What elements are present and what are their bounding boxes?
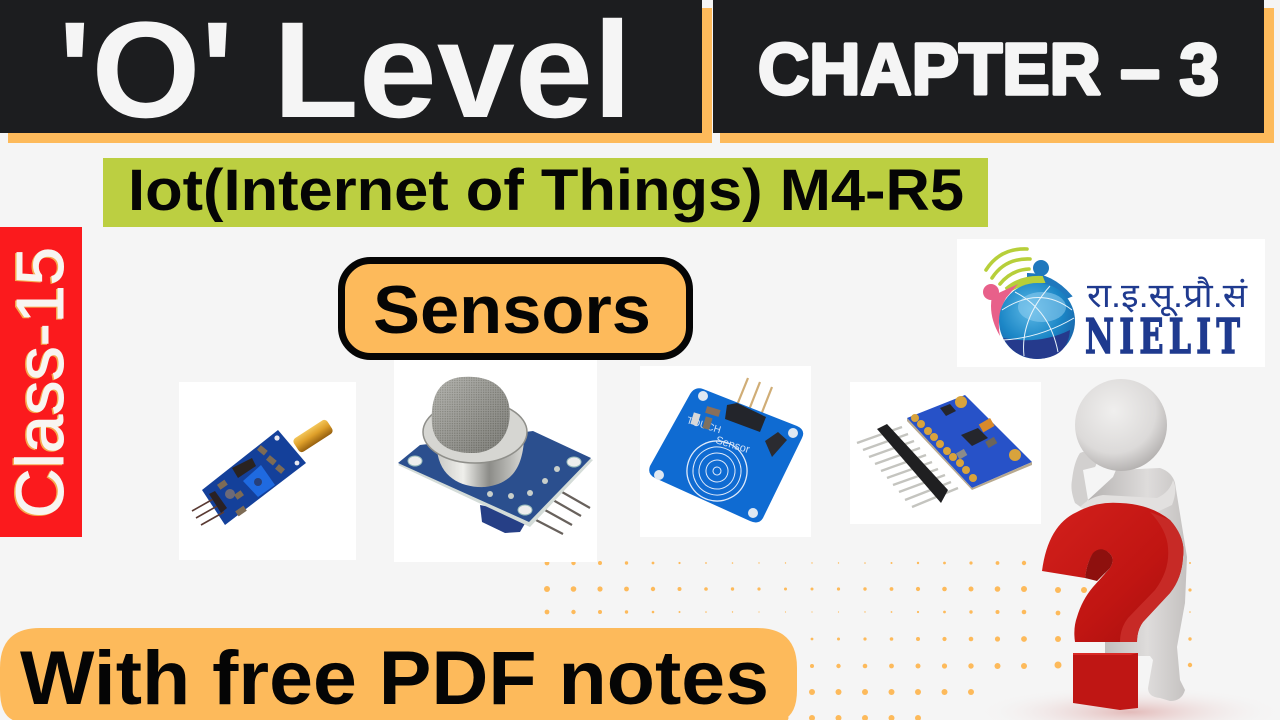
question mark shadow side	[1120, 512, 1183, 642]
image: tilt sensor module	[179, 382, 356, 560]
mesh dome	[432, 377, 510, 453]
header pins	[192, 498, 224, 525]
board label: Sensor	[714, 434, 751, 456]
potentiometer	[243, 465, 275, 497]
header pins	[735, 378, 772, 420]
gold tilt tube	[292, 418, 334, 454]
image: MPU motion sensor module	[850, 382, 1041, 524]
people figures	[1033, 260, 1049, 276]
hindi logotype: रा.इ.सू.प्रौ.सं	[1087, 276, 1248, 317]
wifi arcs	[986, 249, 1030, 284]
connector	[480, 505, 530, 533]
header block	[877, 424, 948, 503]
pcb	[649, 388, 803, 522]
metal base	[437, 440, 524, 487]
callout text: With free PDF notes	[20, 636, 769, 720]
question mark	[1042, 503, 1183, 642]
NIELIT wordmark: NIELIT	[1085, 308, 1245, 365]
pcb	[398, 433, 593, 527]
question mark dot	[1073, 653, 1138, 710]
Sensors text: Sensors	[373, 272, 651, 348]
connector	[725, 403, 766, 432]
callout: free PDF notes	[0, 628, 797, 720]
heading: Chapter 3: CHAPTER – 3	[758, 30, 1219, 110]
figure head	[1075, 379, 1167, 471]
mount holes	[408, 456, 422, 466]
globe	[999, 283, 1075, 359]
chips	[961, 428, 988, 446]
logo: NIELIT	[957, 239, 1265, 367]
question mark inner hollow	[1085, 549, 1113, 581]
pcb	[202, 430, 306, 525]
board label: touch: TOUCH	[685, 415, 722, 436]
pcb	[907, 395, 1032, 488]
figure body	[1088, 468, 1187, 701]
panel: O Level title	[0, 0, 712, 147]
course name text: Iot(Internet of Things) M4-R5	[128, 158, 964, 223]
panel: chapter heading	[713, 0, 1274, 143]
side label: Class 15: Class-15	[2, 248, 76, 519]
touch pad rings	[680, 434, 754, 508]
mount holes	[698, 391, 708, 401]
header pins	[857, 427, 958, 507]
label: Sensors pill	[342, 260, 690, 356]
figure forearm	[1071, 452, 1096, 508]
pins	[536, 492, 590, 534]
illustration: thinking figure with question mark	[975, 379, 1280, 720]
image: touch sensor module	[640, 366, 811, 537]
banner: course name	[103, 158, 988, 227]
decorative dot field	[544, 561, 1192, 720]
image: MQ gas sensor	[394, 360, 597, 562]
gold pads	[911, 396, 1021, 482]
Class 15 text: Class-15	[3, 247, 78, 518]
figure arm	[1080, 480, 1175, 520]
